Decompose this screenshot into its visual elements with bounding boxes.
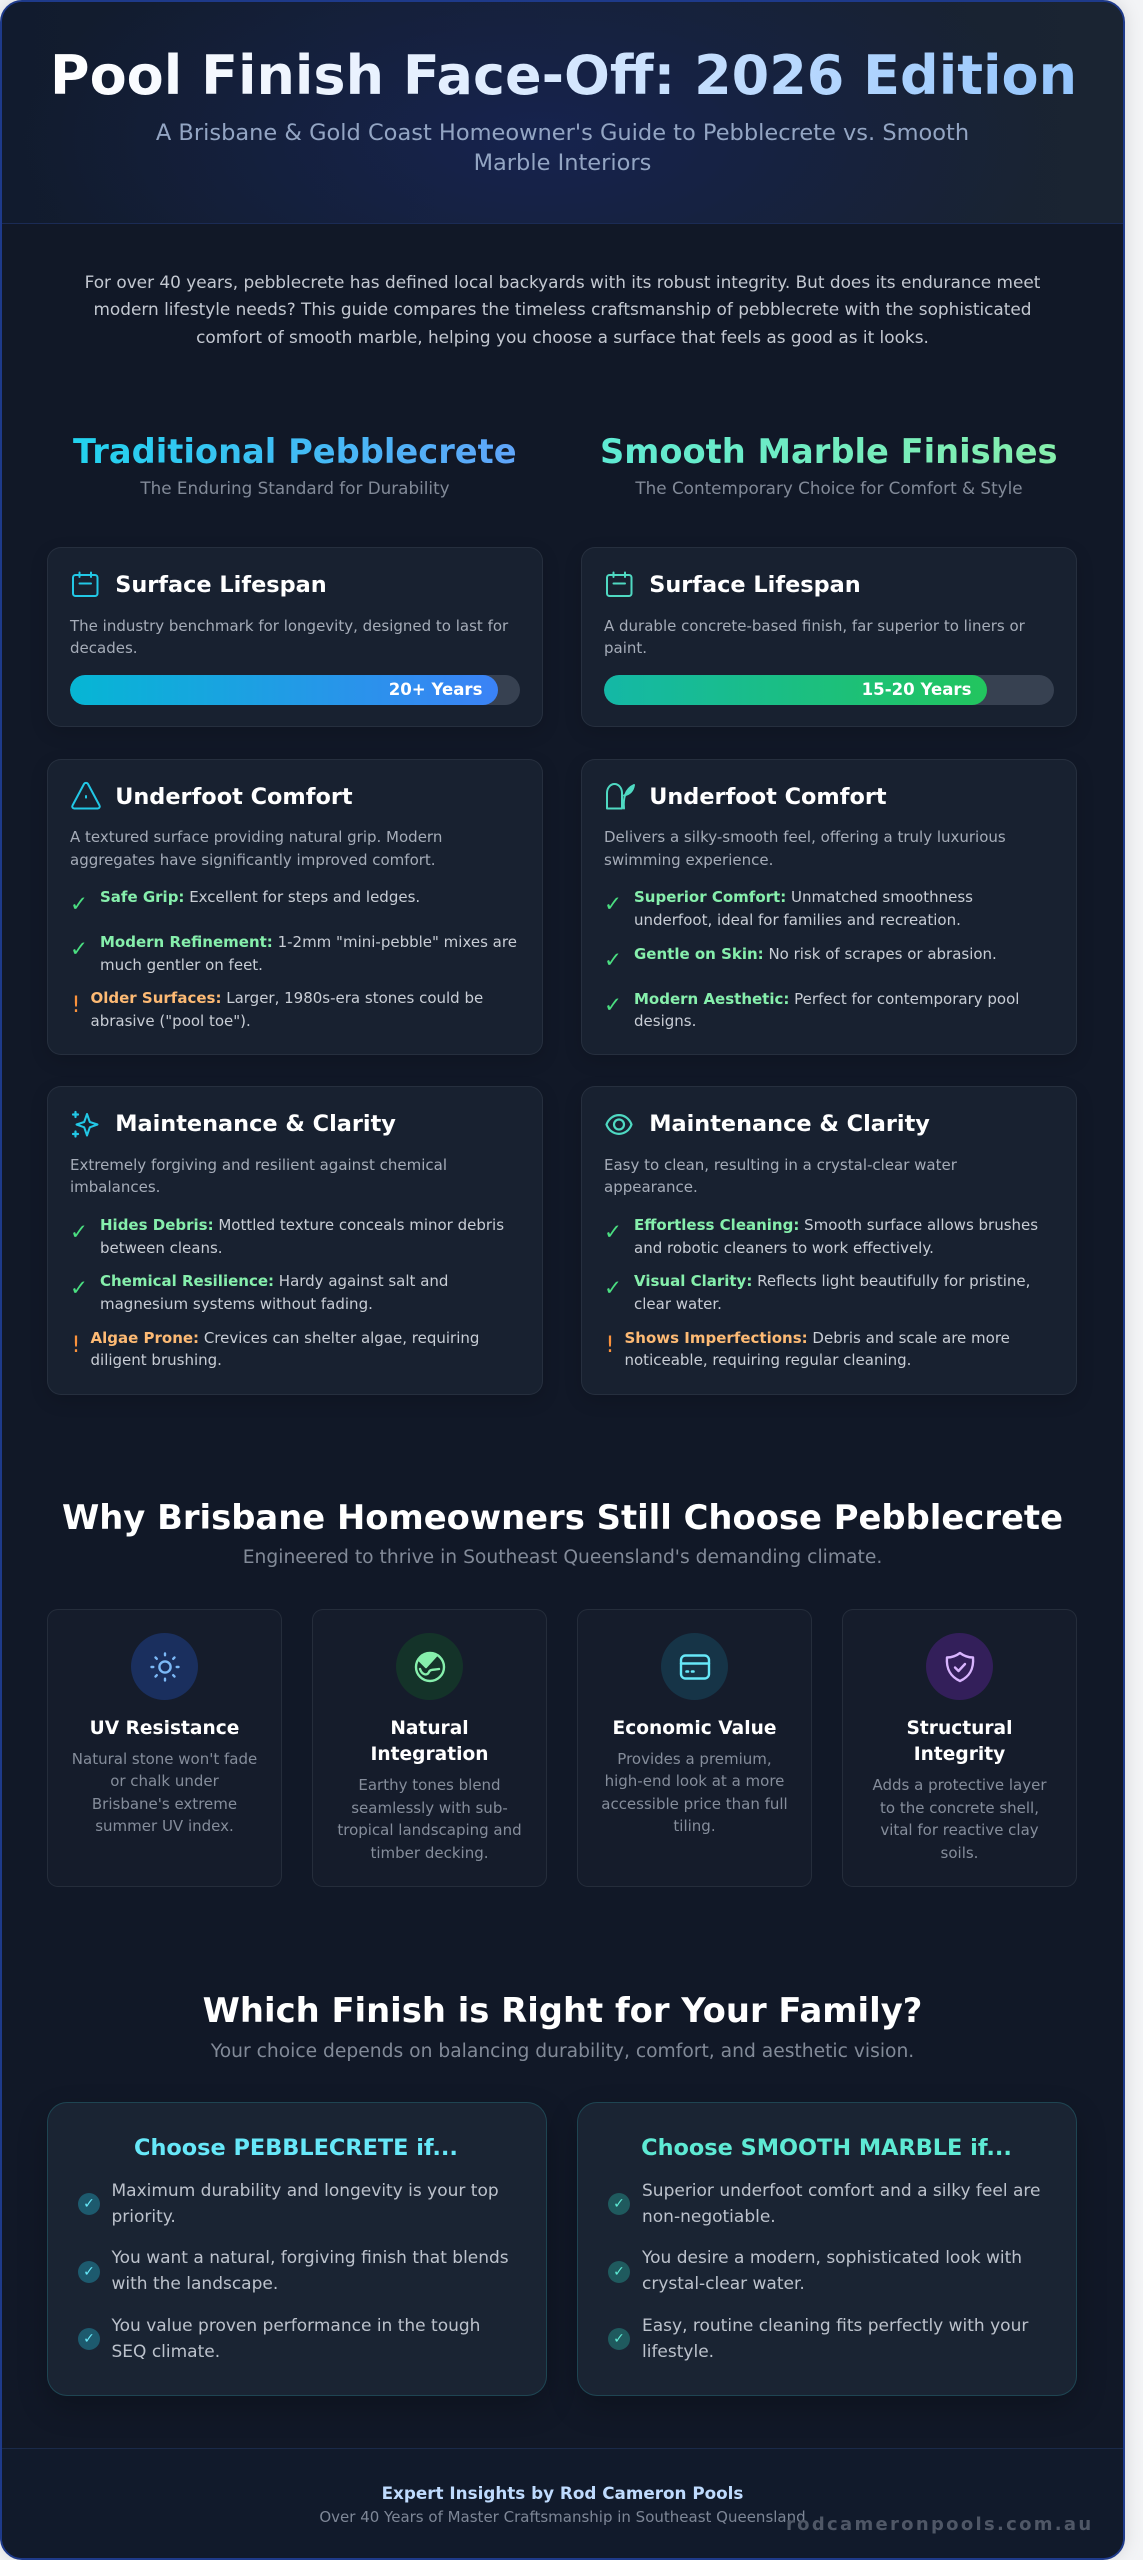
reason text: You value proven performance in the tough (112, 2316, 480, 2336)
check badge: ✓ (613, 2264, 625, 2280)
reason text (642, 2248, 1022, 2294)
check badge (78, 2260, 100, 2282)
check icon: ✓ (604, 1220, 622, 1245)
benefit title: Economic Value (613, 1718, 776, 1739)
benefit title: Natural (390, 1718, 469, 1739)
reason text: non-negotiable. (642, 2207, 776, 2227)
check badge (608, 2260, 630, 2282)
list item: gentle on skin: Gentle on Skin: No risk of scrapes or abrasion. (634, 945, 997, 963)
check icon: ✓ (70, 892, 88, 917)
benefit text: summer UV index. (95, 1817, 234, 1835)
list item: superior comfort: Superior Comfort: Unmatched smoothness (634, 888, 973, 906)
list item: algae prone: Algae Prone: Crevices can shelter algae, requiring (90, 1328, 479, 1346)
list item: modern aesthetic: Modern Aesthetic: Perfect for contemporary pool (634, 990, 1019, 1008)
benefit text: vital for reactive clay (880, 1821, 1039, 1839)
description: A durable concrete-based finish, far superior to liners or (604, 617, 1025, 635)
description: decades. (70, 639, 138, 657)
list item: visual clarity: Visual Clarity: Reflects light beautifully for pristine, (634, 1272, 1030, 1290)
subtitle (156, 120, 969, 176)
reason text: crystal-clear water. (642, 2274, 805, 2294)
panel: pebblecrete underfoot comfort (47, 759, 543, 1055)
list item: effortless cleaning: Effortless Cleaning: Smooth surface allows brushes (634, 1216, 1038, 1234)
description: swimming experience. (604, 851, 773, 869)
benefit text (601, 1750, 788, 1835)
list item: shows imperfections (624, 1328, 1010, 1369)
panel: marble underfoot comfort (581, 759, 1077, 1055)
subheading: pebblecrete: The Enduring Standard for Durability (140, 478, 450, 498)
benefit title: UV Resistance (90, 1718, 239, 1739)
reason text (642, 2181, 1040, 2227)
list item: superior comfort: underfoot, ideal for families and recreation. (634, 911, 961, 929)
description (604, 617, 1025, 657)
benefit title: Integrity (914, 1744, 1005, 1765)
benefit text (872, 1776, 1047, 1862)
benefit card: economic value (577, 1609, 812, 1887)
icon: warning triangle (71, 782, 101, 810)
list item: older surfaces: abrasive ("pool toe"). (90, 1012, 251, 1030)
list item: hides debris: Hides Debris: Mottled texture conceals minor debris (100, 1216, 504, 1234)
list item: older surfaces: Older Surfaces: Larger, 1980s-era stones could be (90, 989, 483, 1007)
description (70, 828, 442, 869)
progress bar: 20+ years (70, 674, 520, 704)
description: Easy to clean, resulting in a crystal-clear water (604, 1156, 957, 1174)
check icon: ✓ (604, 993, 622, 1018)
footer subtitle: Over 40 Years of Master Craftsmanship in Southeast Queensland (319, 2508, 806, 2526)
icon: shield check (926, 1633, 993, 1700)
icon: calendar (72, 572, 98, 597)
list item: safe grip: Safe Grip: Excellent for steps and ledges. (100, 888, 420, 906)
check badge: ✓ (613, 2196, 625, 2212)
icon: credit card (661, 1633, 728, 1700)
warning icon: ! (72, 992, 80, 1018)
list item: chemical resilience (100, 1272, 448, 1313)
reason text: priority. (112, 2207, 176, 2227)
reason text: You want a natural, forgiving finish that blends (112, 2248, 509, 2268)
reason text: Superior underfoot comfort and a silky feel are (642, 2181, 1040, 2201)
benefit text: Provides a premium, (617, 1750, 772, 1768)
description (604, 828, 1006, 869)
reason text (642, 2316, 1028, 2362)
intro paragraph: For over 40 years, pebblecrete has defined local backyards with its robust integrity. But does its endurance meet (85, 272, 1040, 292)
benefit title: Structural (907, 1718, 1012, 1739)
section heading: which finish: Which Finish is Right for Your Family? (203, 1991, 922, 2030)
benefit text: or chalk under (110, 1772, 219, 1790)
benefit text: timber decking. (370, 1844, 488, 1862)
heading: smooth marble: Smooth Marble Finishes (600, 432, 1058, 471)
title: Pool Finish Face-Off: 2026 Edition (50, 44, 1077, 107)
icon: sun (131, 1633, 198, 1700)
benefit text: seamlessly with sub- (351, 1799, 508, 1817)
list item: modern refinement: much gentler on feet. (100, 956, 263, 974)
intro paragraph: modern lifestyle needs? This guide compares the timeless craftsmanship of pebblecrete with the sophisticated (93, 299, 1032, 319)
benefit card: natural integration (312, 1609, 547, 1887)
check badge (608, 2193, 630, 2215)
reason text: lifestyle. (642, 2342, 714, 2362)
benefit text: soils. (941, 1844, 978, 1862)
benefit text: tiling. (673, 1817, 716, 1835)
check badge: ✓ (613, 2331, 625, 2347)
benefit text: to the concrete shell, (880, 1799, 1039, 1817)
reason text: SEQ climate. (112, 2342, 220, 2362)
icon: arch and sprout (606, 783, 635, 810)
description: A textured surface providing natural grip. Modern (70, 828, 442, 846)
reason text (112, 2181, 499, 2227)
icon: calendar (606, 572, 632, 597)
warning icon: ! (606, 1332, 614, 1358)
check icon: ✓ (70, 1276, 88, 1301)
intro paragraph (85, 272, 1040, 346)
check icon: ✓ (70, 937, 88, 962)
benefit title (371, 1718, 488, 1765)
footer (0, 2448, 1125, 2560)
description: The industry benchmark for longevity, designed to last for (70, 617, 508, 635)
list item: shows imperfections: Shows Imperfections: Debris and scale are more (624, 1328, 1010, 1346)
reason text: Maximum durability and longevity is your top (112, 2181, 499, 2201)
reason text (112, 2248, 509, 2294)
warning icon: ! (72, 1332, 80, 1358)
icon: eye (605, 1114, 633, 1135)
heading: traditional pebblecrete: Traditional Pebblecrete (73, 432, 517, 471)
list item: algae prone (90, 1328, 479, 1369)
list item: modern refinement (100, 933, 517, 974)
benefit card: structural integrity (842, 1609, 1077, 1887)
list item: effortless cleaning (634, 1216, 1038, 1256)
list item: modern refinement: Modern Refinement: 1-2mm "mini-pebble" mixes are (100, 933, 517, 951)
description (70, 1156, 447, 1196)
list item: visual clarity (634, 1272, 1030, 1313)
list item: chemical resilience: Chemical Resilience: Hardy against salt and (100, 1272, 448, 1290)
list item: modern aesthetic (634, 990, 1019, 1030)
description (70, 617, 508, 657)
benefit text: Adds a protective layer (872, 1776, 1047, 1794)
description: paint. (604, 639, 647, 657)
card title: Maintenance & Clarity (649, 1111, 930, 1137)
benefit text: tropical landscaping and (337, 1821, 522, 1839)
description: appearance. (604, 1178, 698, 1196)
reason text: You desire a modern, sophisticated look with (642, 2248, 1022, 2268)
benefit card: uv resistance (47, 1609, 282, 1887)
footer title: Expert Insights by Rod Cameron Pools (382, 2483, 743, 2503)
benefit text: accessible price than full (601, 1795, 788, 1813)
panel: choose smooth marble (577, 2102, 1077, 2396)
icon: globe (396, 1633, 463, 1700)
benefit text: Natural stone won't fade (72, 1750, 257, 1768)
progress bar: 20+ years: 20+ Years (389, 680, 482, 698)
list item: effortless cleaning: and robotic cleaners to work effectively. (634, 1238, 934, 1256)
check icon: ✓ (604, 948, 622, 973)
progress bar: 15-20 years (604, 674, 1054, 704)
intro paragraph: comfort of smooth marble, helping you choose a surface that feels as good as it looks. (196, 326, 929, 346)
list item: algae prone: diligent brushing. (90, 1351, 222, 1369)
watermark: rodcameronpools.com.au (786, 2514, 1094, 2534)
header banner (0, 0, 1125, 224)
description: aggregates have significantly improved comfort. (70, 851, 436, 869)
check icon: ✓ (604, 1276, 622, 1301)
subheading: marble: The Contemporary Choice for Comfort & Style (635, 478, 1023, 498)
description: Extremely forgiving and resilient against chemical (70, 1156, 447, 1174)
list item: shows imperfections: noticeable, requiring regular cleaning. (624, 1351, 911, 1369)
list item: older surfaces (90, 989, 483, 1030)
list item: hides debris: between cleans. (100, 1238, 223, 1256)
section heading: why brisbane: Why Brisbane Homeowners Still Choose Pebblecrete (62, 1498, 1063, 1537)
check badge (608, 2328, 630, 2350)
check badge: ✓ (83, 2331, 95, 2347)
card title: Maintenance & Clarity (115, 1111, 396, 1137)
panel: pebblecrete maintenance (47, 1086, 543, 1395)
section subheading: Engineered to thrive in Southeast Queensland's demanding climate. (243, 1547, 882, 1568)
icon: sparkles (72, 1110, 98, 1138)
progress bar: 15-20 years: 15-20 Years (862, 680, 972, 698)
benefit text (72, 1750, 257, 1835)
panel: marble maintenance (581, 1086, 1077, 1395)
description: Delivers a silky-smooth feel, offering a truly luxurious (604, 828, 1006, 846)
benefit text: Brisbane's extreme (92, 1795, 237, 1813)
list item: hides debris (100, 1216, 504, 1256)
panel title: Choose SMOOTH MARBLE if... (641, 2135, 1012, 2161)
benefit text (337, 1776, 522, 1862)
card title: Underfoot Comfort (649, 784, 887, 810)
benefit title: Integration (371, 1744, 488, 1765)
panel: choose pebblecrete (47, 2102, 547, 2396)
benefit title (907, 1718, 1012, 1765)
check icon: ✓ (70, 1220, 88, 1245)
panel: pebblecrete surface lifespan (47, 547, 543, 727)
reason text: with the landscape. (112, 2274, 278, 2294)
check icon: ✓ (604, 892, 622, 917)
panel: marble surface lifespan (581, 547, 1077, 727)
check badge (78, 2193, 100, 2215)
reason text: Easy, routine cleaning fits perfectly with your (642, 2316, 1028, 2336)
card title: Surface Lifespan (115, 572, 327, 598)
list item: superior comfort (634, 888, 973, 929)
check badge (78, 2328, 100, 2350)
description (604, 1156, 957, 1196)
description: imbalances. (70, 1178, 160, 1196)
benefit text: high-end look at a more (605, 1772, 784, 1790)
list item: visual clarity: clear water. (634, 1295, 722, 1313)
list item: chemical resilience: magnesium systems without fading. (100, 1295, 373, 1313)
check badge: ✓ (83, 2196, 95, 2212)
reason text (112, 2316, 480, 2362)
check badge: ✓ (83, 2264, 95, 2280)
subtitle: A Brisbane & Gold Coast Homeowner's Guide to Pebblecrete vs. Smooth (156, 120, 969, 146)
benefit text: Earthy tones blend (358, 1776, 501, 1794)
subtitle: Marble Interiors (474, 150, 651, 176)
list item: modern aesthetic: designs. (634, 1012, 696, 1030)
section subheading: Your choice depends on balancing durability, comfort, and aesthetic vision. (211, 2041, 914, 2062)
panel title: Choose PEBBLECRETE if... (134, 2135, 458, 2161)
card title: Surface Lifespan (649, 572, 861, 598)
card title: Underfoot Comfort (115, 784, 353, 810)
